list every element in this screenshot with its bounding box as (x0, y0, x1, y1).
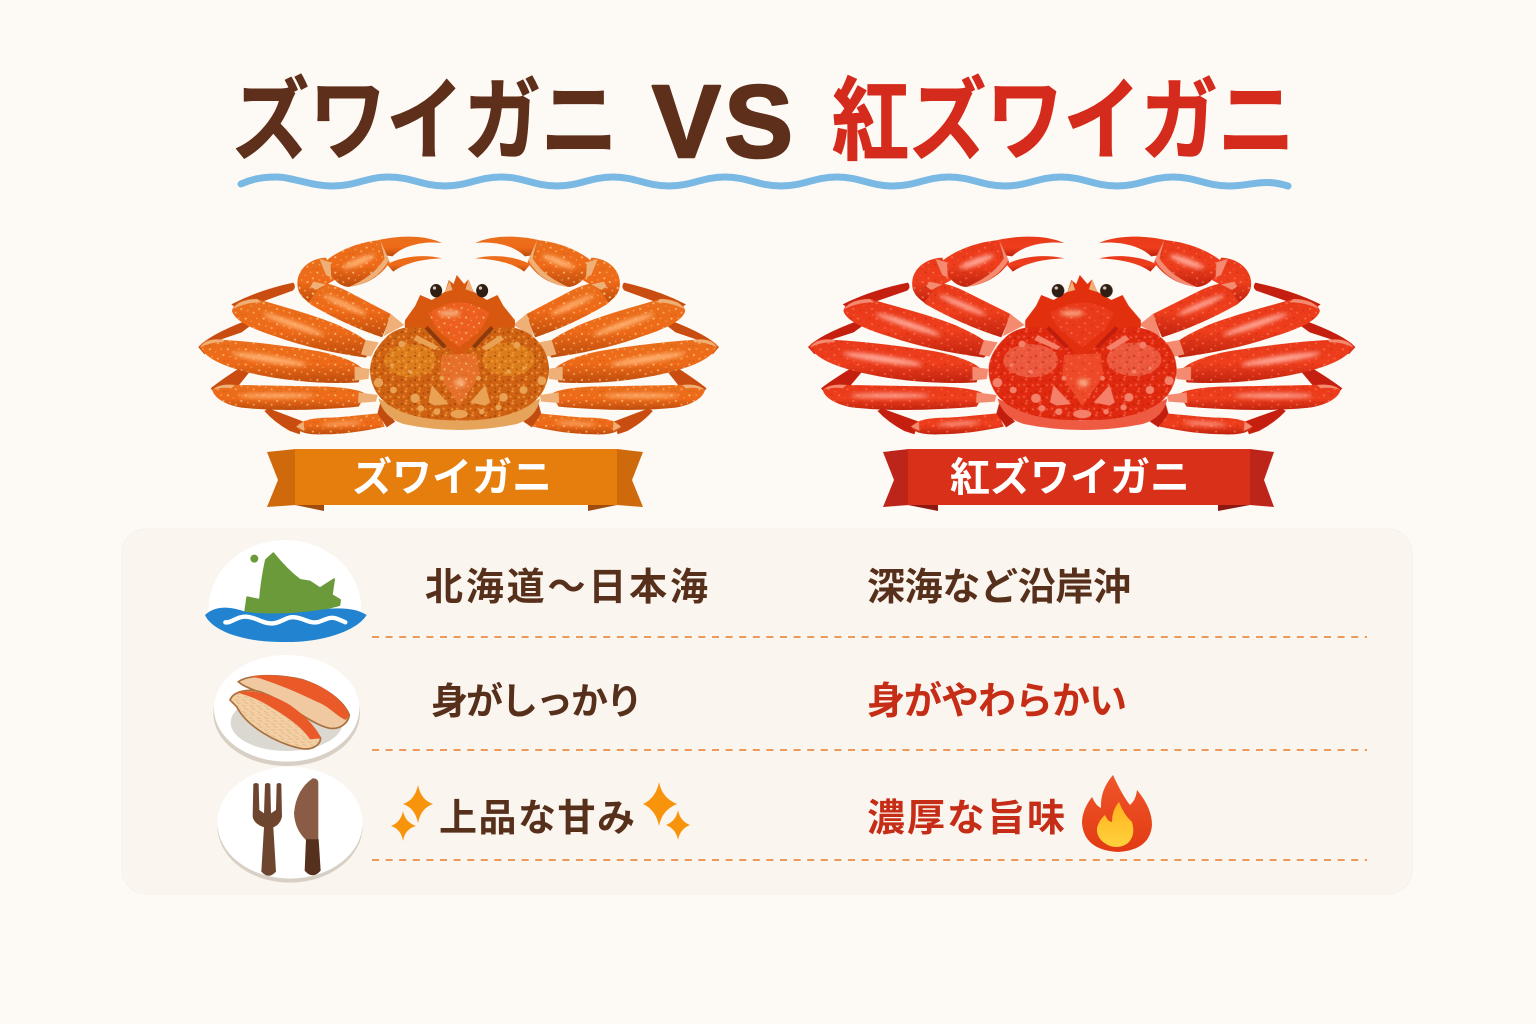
icon: Hokkaido and sea (205, 540, 367, 642)
icon: sparkles right (643, 782, 690, 840)
ribbon: snow crab (267, 449, 643, 511)
fork (253, 783, 282, 876)
ribbon: red snow crab (883, 449, 1274, 511)
icon: fork and knife on plate (217, 767, 363, 883)
icon: sparkles left (391, 785, 433, 841)
knife (294, 778, 318, 840)
title: snow crab: ズワイガニ (232, 72, 618, 172)
text: flavour left: 上品な甘み (439, 798, 635, 840)
legs and claw: right side (1099, 237, 1355, 434)
title wavy underline (241, 177, 1288, 186)
legs and claw: left side (808, 237, 1064, 434)
icon: flame (1082, 775, 1152, 852)
text: habitat left: 北海道〜日本海 (425, 567, 708, 609)
carapace and eyes (989, 275, 1177, 430)
text: flavour right: 濃厚な旨味 (867, 798, 1065, 840)
crab illustration: red snow crab (808, 237, 1355, 434)
icon: crab meat on plate (213, 655, 360, 766)
crab illustration: snow crab (198, 237, 719, 434)
title: VS: VS (652, 64, 793, 179)
panel: comparison table (122, 529, 1412, 894)
legs and claw: right side (475, 237, 719, 434)
text: habitat right: 深海など沿岸沖 (867, 567, 1131, 609)
title (232, 64, 1295, 179)
legs and claw: left side (198, 237, 442, 434)
title: red snow crab: 紅ズワイガニ (832, 72, 1295, 172)
ribbon label: 紅ズワイガニ (950, 456, 1190, 500)
ribbon label: ズワイガニ (352, 456, 552, 500)
carapace and eyes (370, 275, 549, 430)
text: texture right: 身がやわらかい (867, 681, 1127, 723)
text: texture left: 身がしっかり (431, 681, 643, 722)
